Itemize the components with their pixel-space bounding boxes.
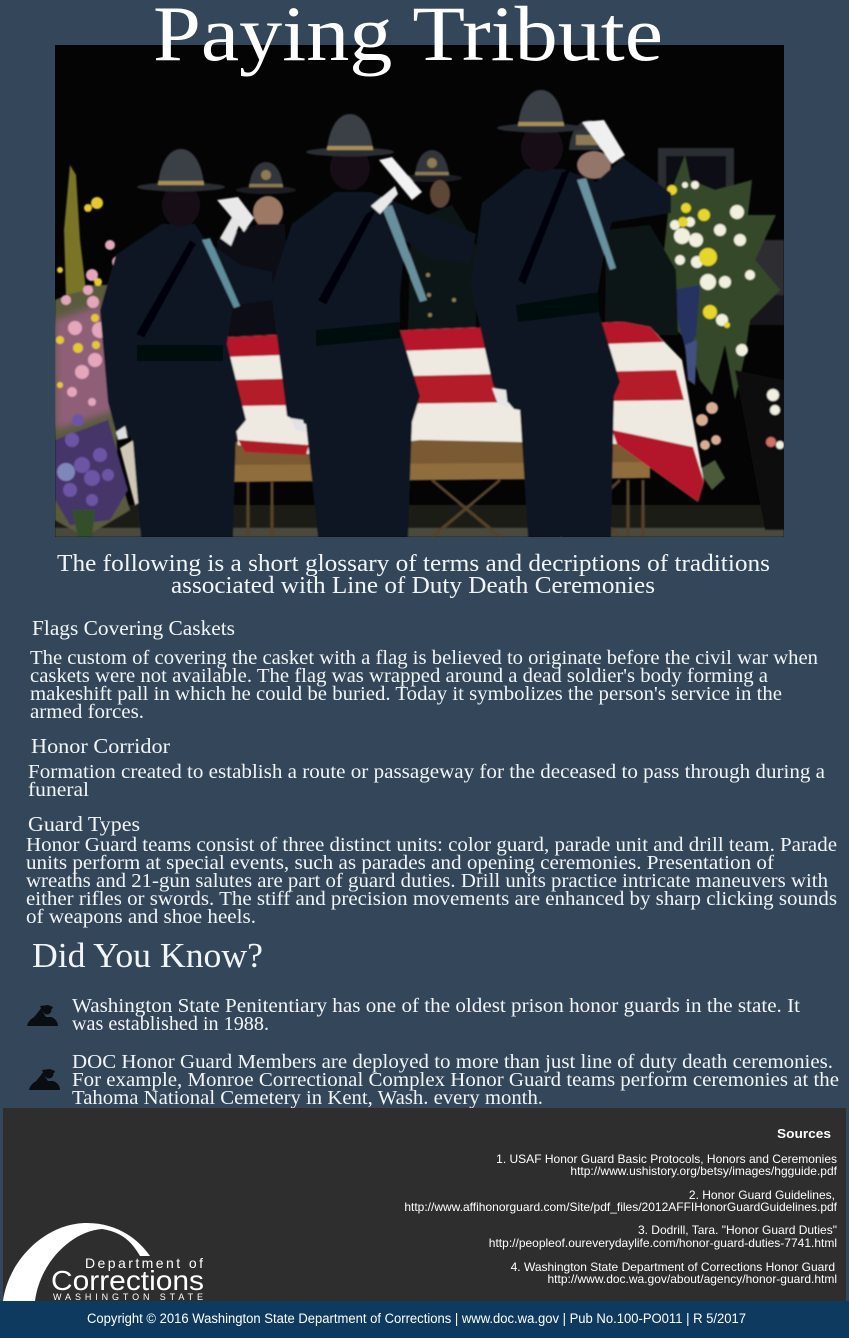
section: honor corridor (28, 734, 825, 801)
logo: department of corrections: WASHINGTON STATE (53, 1292, 203, 1302)
photo floor and stage (55, 148, 784, 537)
heading: did you know: Did You Know? (32, 936, 263, 975)
text: guard types description: wreaths and 21-gun salutes are part of guard duties. Drill units practice intricate maneuvers with (26, 870, 828, 892)
rear officers (217, 120, 678, 335)
copyright bar: Copyright © 2016 Washington State Department of Corrections | www.doc.wa.gov | Pub No.100-PO011 | R 5/2017 (87, 1311, 746, 1326)
intro text (57, 551, 770, 599)
intro text: The following is a short glossary of terms and decriptions of traditions (57, 551, 770, 577)
section: flags covering caskets (30, 616, 818, 723)
text: guard types description: units perform at special events, such as parades and opening ceremonies. Presentation of (26, 852, 774, 874)
copyright bar (0, 1301, 849, 1338)
photo: honor guard saluting flag-draped casket (55, 45, 784, 537)
source list: 3. Dodrill, Tara. "Honor Guard Duties" (638, 1223, 837, 1237)
text: flags description (30, 647, 818, 723)
source list: 4. Washington State Department of Corrections Honor Guard (511, 1260, 835, 1274)
text: guard types description (26, 834, 837, 928)
text: flags description: makeshift pall in which he could be buried. Today it symbolizes the person's service in the (30, 683, 782, 705)
logo: department of corrections: Corrections (51, 1265, 204, 1296)
panel: sources footer (3, 1108, 846, 1302)
heading: guard types: Guard Types (28, 812, 140, 836)
fact 1 (27, 995, 800, 1035)
heading: flags covering caskets: Flags Covering Caskets (32, 616, 235, 640)
source list: http://www.ushistory.org/betsy/images/hgguide.pdf (570, 1164, 838, 1178)
soldier: left (100, 149, 272, 537)
text: fact 1: was established in 1988. (72, 1013, 269, 1035)
text: fact 2: For example, Monroe Correctional Complex Honor Guard teams perform ceremonies at the (72, 1069, 839, 1091)
source list: http://peopleof.oureverydaylife.com/honor-guard-duties-7741.html (489, 1236, 837, 1250)
text: fact 2 (72, 1051, 839, 1109)
text: flags description: The custom of covering the casket with a flag is believed to originate before the civil war when (30, 647, 818, 669)
section: guard types (26, 812, 837, 928)
heading: honor corridor: Honor Corridor (31, 734, 170, 758)
source list: 1. USAF Honor Guard Basic Protocols, Honors and Ceremonies (496, 1152, 837, 1166)
soldier: center (271, 114, 476, 537)
source list: http://www.affihonorguard.com/Site/pdf_files/2012AFFIHonorGuardGuidelines.pdf (404, 1200, 838, 1214)
text: corridor description: funeral (28, 779, 89, 801)
text: flags description: armed forces. (30, 701, 144, 723)
source list (404, 1152, 838, 1286)
heading: sources: Sources (777, 1126, 831, 1141)
text: fact 2: Tahoma National Cemetery in Kent, Wash. every month. (72, 1087, 543, 1109)
logo: department of corrections: Department of (85, 1255, 203, 1271)
source list: http://www.doc.wa.gov/about/agency/honor-guard.html (548, 1272, 837, 1286)
flag-draped casket (120, 322, 704, 537)
right flower arrangement (664, 155, 784, 530)
text: fact 2: DOC Honor Guard Members are deployed to more than just line of duty death ceremonies. (72, 1051, 833, 1073)
logo: department of corrections (3, 1223, 204, 1302)
text: guard types description: Honor Guard teams consist of three distinct units: color guard, parade unit and drill team. Parade (26, 834, 837, 856)
source list: 2. Honor Guard Guidelines, (689, 1188, 835, 1202)
text: guard types description: of weapons and shoe heels. (26, 906, 256, 928)
text: fact 1 (72, 995, 800, 1035)
text: corridor description: Formation created to establish a route or passageway for the deceased to pass through during a (28, 761, 825, 783)
icon: saluting guard (29, 1069, 60, 1090)
text: fact 1: Washington State Penitentiary has one of the oldest prison honor guards in the state. It (72, 995, 800, 1017)
text: flags description: caskets were not available. The flag was wrapped around a dead soldier's body forming a (30, 665, 768, 687)
left flower arrangement (55, 165, 131, 537)
text: guard types description: either rifles or swords. The stiff and precision movements are enhanced by sharp clicking sounds (26, 888, 837, 910)
icon: saluting guard (27, 1005, 58, 1026)
text: corridor description (28, 761, 825, 801)
fact 2 (29, 1051, 839, 1109)
soldier: right (471, 90, 671, 537)
intro text: associated with Line of Duty Death Ceremonies (171, 573, 655, 599)
